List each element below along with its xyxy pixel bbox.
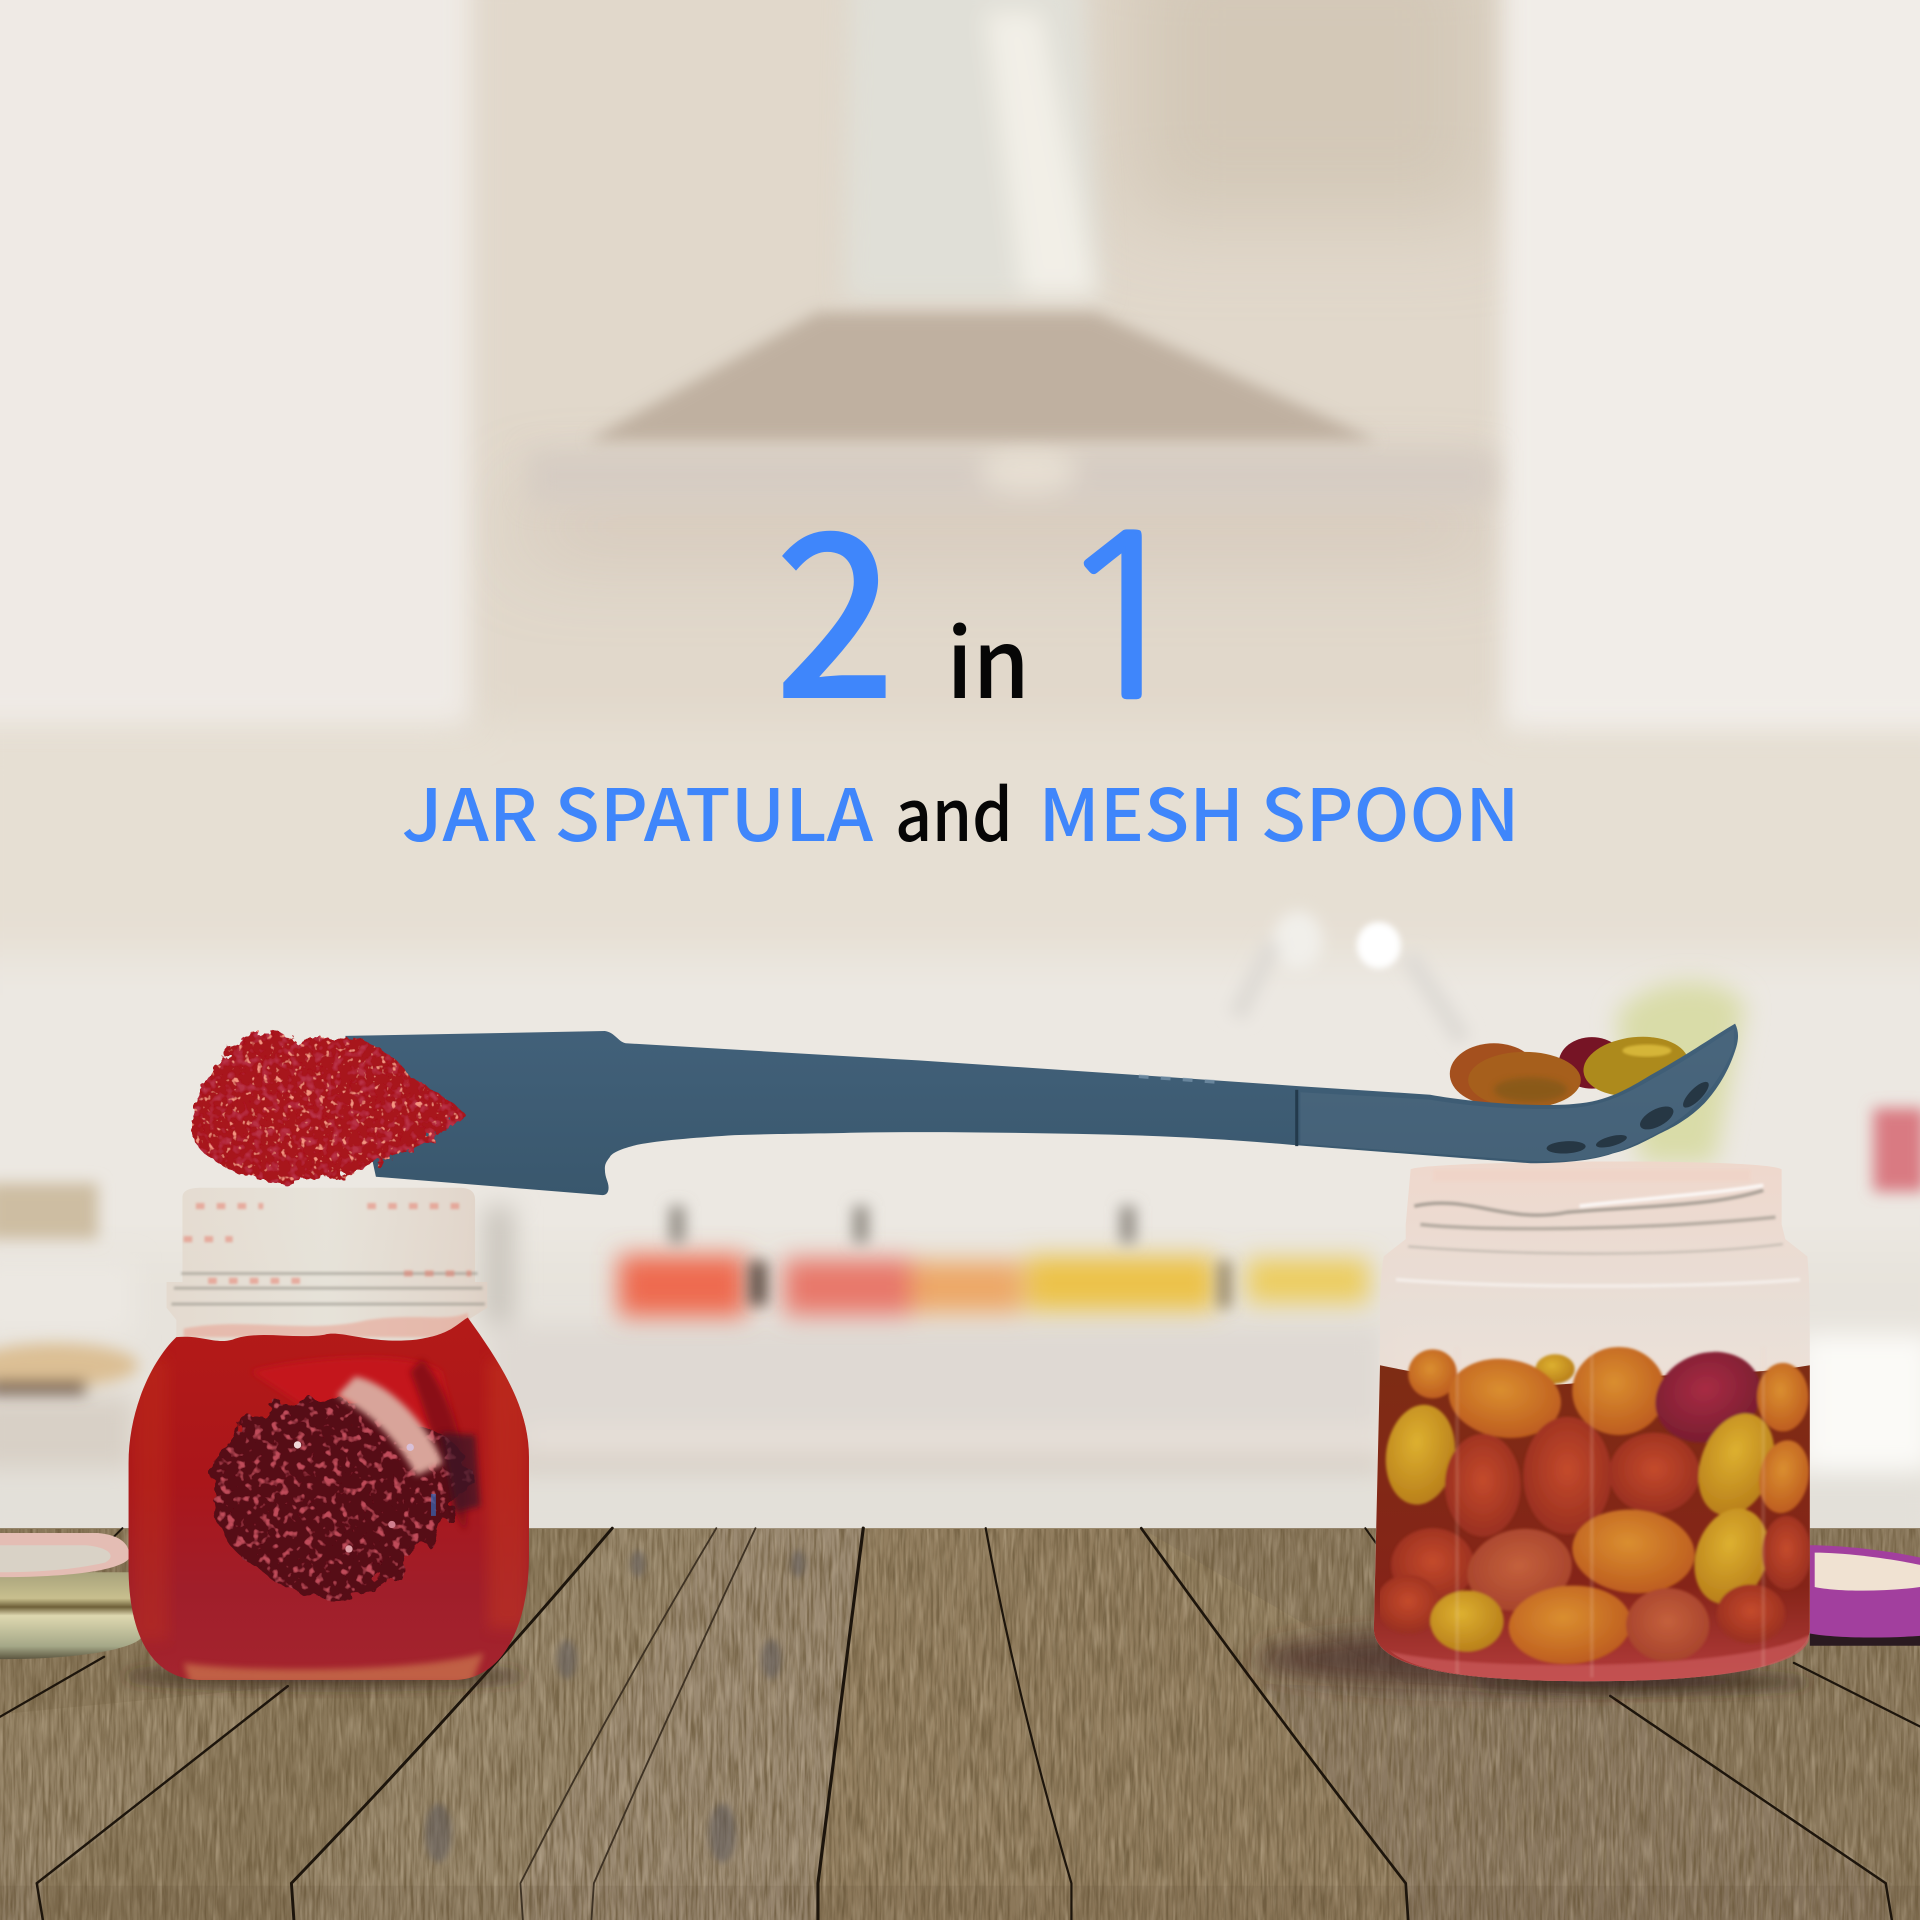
hood canopy [588, 312, 1378, 441]
subtitle: JAR SPATULA and MESH SPOON: MESH SPOON [1038, 757, 1520, 862]
subtitle: JAR SPATULA and MESH SPOON: JAR SPATULA [402, 757, 873, 862]
wood planks [0, 1528, 1920, 1920]
jam jar [129, 1188, 529, 1684]
glass [1374, 1162, 1810, 1681]
brine [1374, 1365, 1810, 1681]
range hood [529, 0, 1494, 502]
cooktop and counter [0, 1206, 1920, 1536]
wall shading [529, 0, 1494, 549]
subtitle: JAR SPATULA and MESH SPOON [402, 757, 1520, 862]
wooden table top [0, 1528, 1920, 1920]
title: 2 in 1: 1 [1052, 507, 1196, 730]
olives in jar [1374, 1337, 1815, 1690]
title: 2 in 1: 2 [774, 432, 896, 764]
title: 2 in 1: in [947, 587, 1030, 726]
spoon holes [1546, 1078, 1712, 1154]
olive jar [1374, 1162, 1815, 1690]
plank seams [0, 1528, 1920, 1920]
title: 2 in 1 [774, 432, 1196, 764]
jar shadows [122, 1630, 1812, 1692]
embossed fruit [213, 1376, 480, 1602]
purple lid [1810, 1545, 1920, 1646]
table front edge [0, 1886, 1920, 1920]
spoon olives [1450, 1032, 1691, 1108]
kitchen cabinets [0, 0, 1920, 729]
jam blob on spatula [190, 1033, 468, 1183]
glass highlights [1396, 1176, 1800, 1286]
gold lid [0, 1533, 141, 1659]
subtitle: JAR SPATULA and MESH SPOON: and [895, 757, 1013, 862]
background objects [0, 911, 1920, 1393]
jar neck glass [167, 1188, 487, 1347]
wood knots [425, 1550, 806, 1862]
dual-ended utensil: jar spatula and mesh spoon [345, 1024, 1738, 1195]
jam body [129, 1318, 529, 1684]
